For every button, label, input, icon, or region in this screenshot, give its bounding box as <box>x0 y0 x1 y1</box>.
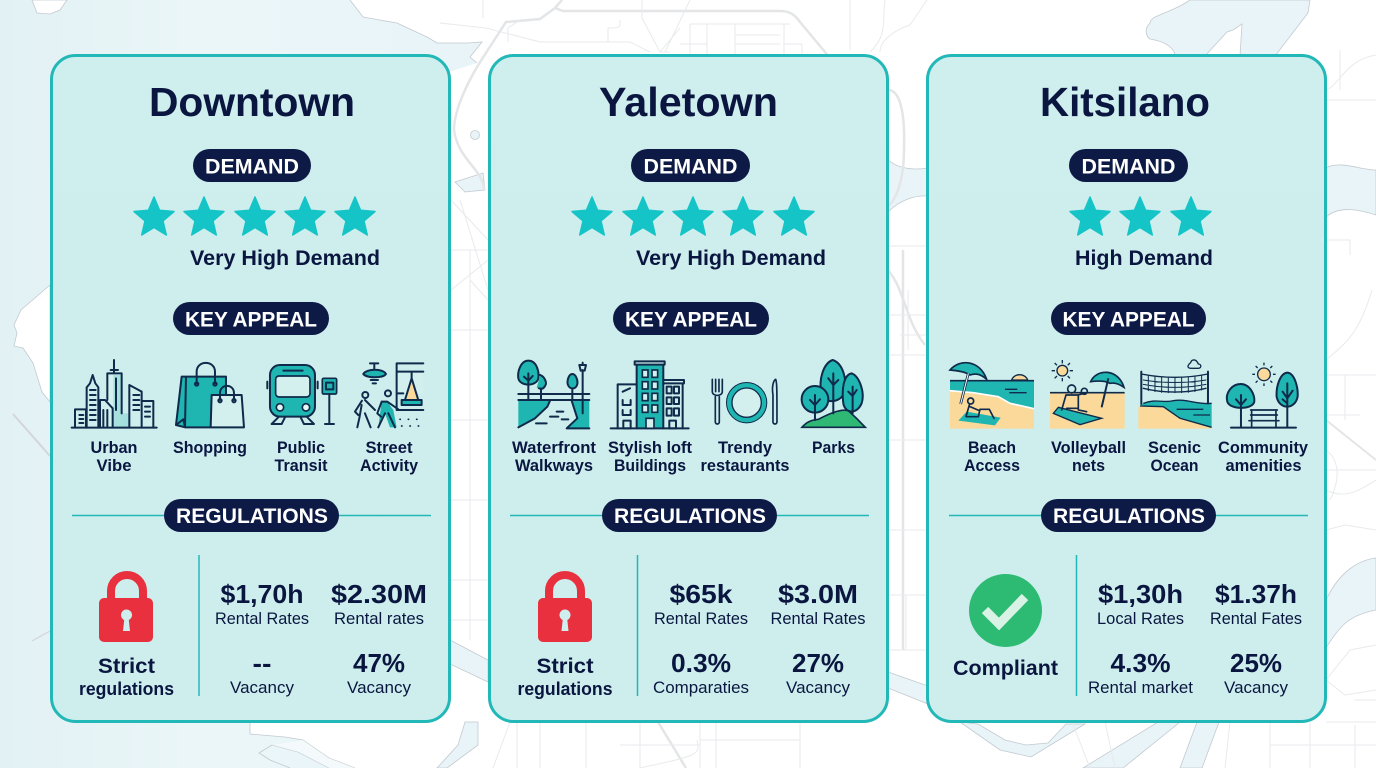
icon: beach access <box>950 363 1034 429</box>
badge: key appeal <box>613 302 769 335</box>
stat: rental rates 1: Rental Rates <box>654 610 748 628</box>
label: Volleyball nets: nets <box>1072 457 1105 475</box>
label: Community amenities <box>1218 439 1309 475</box>
stat: vacancy: 25% <box>1230 648 1282 678</box>
icon: waterfront walkway <box>518 361 589 428</box>
heading: Downtown: Downtown <box>149 79 355 125</box>
badge: demand <box>1069 149 1188 182</box>
stat: rental rates 1: Rental Rates <box>215 610 309 628</box>
label: Beach Access <box>964 439 1020 475</box>
icon: red padlock <box>99 575 153 642</box>
badge: regulations: REGULATIONS <box>614 504 766 528</box>
heading: Kitsilano: Kitsilano <box>1040 79 1210 125</box>
stat: comparaties: 0.3% <box>671 648 731 678</box>
label: Stylish loft Buildings: Buildings <box>614 457 686 475</box>
icon: urban vibe skyline <box>72 360 157 428</box>
stat: vacancy 1: -- <box>252 648 272 678</box>
icon: scenic ocean with net <box>1138 360 1212 429</box>
label: Beach Access: Access <box>964 457 1020 475</box>
label: Public Transit: Public <box>277 439 325 457</box>
rating: three stars <box>1070 197 1211 235</box>
stat: vacancy 1: Vacancy <box>230 679 295 697</box>
stat: comparaties <box>653 648 749 697</box>
label: Street Activity <box>360 439 419 475</box>
stat: rental fates <box>1210 579 1302 628</box>
stat: vacancy: 27% <box>792 648 844 678</box>
text: strict regulations <box>79 655 174 699</box>
icon: street activity <box>355 363 423 427</box>
text: strict regulations <box>518 655 612 699</box>
label: Street Activity: Activity <box>360 457 419 475</box>
label: Community amenities: Community <box>1218 439 1309 457</box>
label: Scenic Ocean <box>1148 439 1201 475</box>
stat: rental rates 2: Rental Rates <box>770 610 866 628</box>
badge: regulations: REGULATIONS <box>1053 504 1205 528</box>
text: strict regulations: Strict <box>536 655 594 678</box>
rating: five stars <box>134 197 375 235</box>
label: Parks: Parks <box>812 439 855 457</box>
stat: vacancy: Vacancy <box>786 679 851 697</box>
label: Waterfront Walkways: Walkways <box>515 457 593 475</box>
text: demand level: Very High Demand <box>190 247 380 270</box>
label: Trendy restaurants: restaurants <box>700 457 790 475</box>
heading: Yaletown: Yaletown <box>599 79 778 125</box>
label: Public Transit <box>274 439 328 475</box>
panel: Downtown <box>52 56 450 722</box>
label: Urban Vibe <box>90 439 138 475</box>
panel: Yaletown <box>490 56 888 722</box>
stat: local rates <box>1097 579 1184 628</box>
label: Public Transit: Transit <box>274 457 328 475</box>
label: Street Activity: Street <box>366 439 413 457</box>
stat: rental rates 2: Rental rates <box>334 610 424 628</box>
badge: demand: DEMAND <box>1082 154 1176 178</box>
badge: regulations <box>72 499 431 532</box>
stat: rental market <box>1088 648 1193 697</box>
stat: rental rates 1: $65k <box>670 579 733 609</box>
icon: stylish loft buildings <box>611 361 689 428</box>
icon: community amenities <box>1227 363 1298 428</box>
stat: rental rates 2 <box>331 579 427 628</box>
label: Beach Access: Beach <box>968 439 1016 457</box>
badge: key appeal: KEY APPEAL <box>1062 308 1194 332</box>
stat: rental rates 2: $3.0M <box>778 579 858 609</box>
label: Stylish loft Buildings: Stylish loft <box>608 439 692 457</box>
badge: key appeal: KEY APPEAL <box>185 308 317 332</box>
stat: rental market: Rental market <box>1088 679 1193 697</box>
badge: regulations <box>510 499 869 532</box>
icon: red padlock <box>538 575 592 642</box>
icon: green check <box>969 574 1042 647</box>
stat: rental rates 2 <box>770 579 866 628</box>
label: Volleyball nets: Volleyball <box>1051 439 1126 457</box>
stat: vacancy: Vacancy <box>1224 679 1289 697</box>
stat: vacancy 1 <box>230 648 295 697</box>
text: strict regulations: regulations <box>79 678 174 699</box>
label: Waterfront Walkways: Waterfront <box>512 439 596 457</box>
stat: rental market: 4.3% <box>1110 648 1170 678</box>
label: Scenic Ocean: Ocean <box>1150 457 1198 475</box>
icon: parks with trees <box>802 360 865 427</box>
badge: demand <box>193 149 311 182</box>
stat: rental fates: $1.37h <box>1215 579 1297 609</box>
text: demand level: High Demand <box>1075 247 1213 270</box>
label: Scenic Ocean: Scenic <box>1148 439 1201 457</box>
icon: plate and cutlery <box>712 379 777 424</box>
label: Trendy restaurants: Trendy <box>718 439 773 457</box>
badge: key appeal <box>1051 302 1206 335</box>
stat: rental fates: Rental Fates <box>1210 610 1302 628</box>
rating: five stars <box>572 197 814 235</box>
stat: vacancy <box>786 648 851 697</box>
stat: local rates: Local Rates <box>1097 610 1184 628</box>
icon: volleyball on beach <box>1050 360 1125 429</box>
stat: rental rates 1: $1,70h <box>220 579 304 609</box>
badge: demand: DEMAND <box>205 154 299 178</box>
stat: comparaties: Comparaties <box>653 679 749 697</box>
text: compliant: Compliant <box>953 656 1058 680</box>
label: Waterfront Walkways <box>512 439 596 475</box>
icon: public transit bus <box>267 365 337 424</box>
badge: demand: DEMAND <box>644 154 738 178</box>
text: demand level: Very High Demand <box>636 247 826 270</box>
label: Community amenities: amenities <box>1226 457 1302 475</box>
stat: vacancy 2: Vacancy <box>347 679 412 697</box>
badge: key appeal: KEY APPEAL <box>625 308 757 332</box>
stat: vacancy 2: 47% <box>353 648 405 678</box>
stat: rental rates 1 <box>215 579 309 628</box>
text: strict regulations: regulations <box>518 678 612 699</box>
badge: key appeal <box>173 302 329 335</box>
stat: vacancy <box>1224 648 1289 697</box>
text: strict regulations: Strict <box>98 655 155 678</box>
label: Shopping: Shopping <box>173 439 247 457</box>
badge: regulations <box>949 499 1308 532</box>
stat: rental rates 1 <box>654 579 748 628</box>
stat: local rates: $1,30h <box>1098 579 1183 609</box>
label: Urban Vibe: Urban <box>90 439 138 457</box>
label: Urban Vibe: Vibe <box>96 457 132 475</box>
stat: vacancy 2 <box>347 648 412 697</box>
label: Trendy restaurants <box>700 439 790 475</box>
stat: rental rates 2: $2.30M <box>331 579 427 609</box>
label: Volleyball nets <box>1051 439 1126 475</box>
badge: regulations: REGULATIONS <box>176 504 328 528</box>
badge: demand <box>631 149 750 182</box>
label: Stylish loft Buildings <box>608 439 692 475</box>
icon: shopping bags <box>176 363 244 427</box>
panel: Kitsilano <box>928 56 1326 722</box>
